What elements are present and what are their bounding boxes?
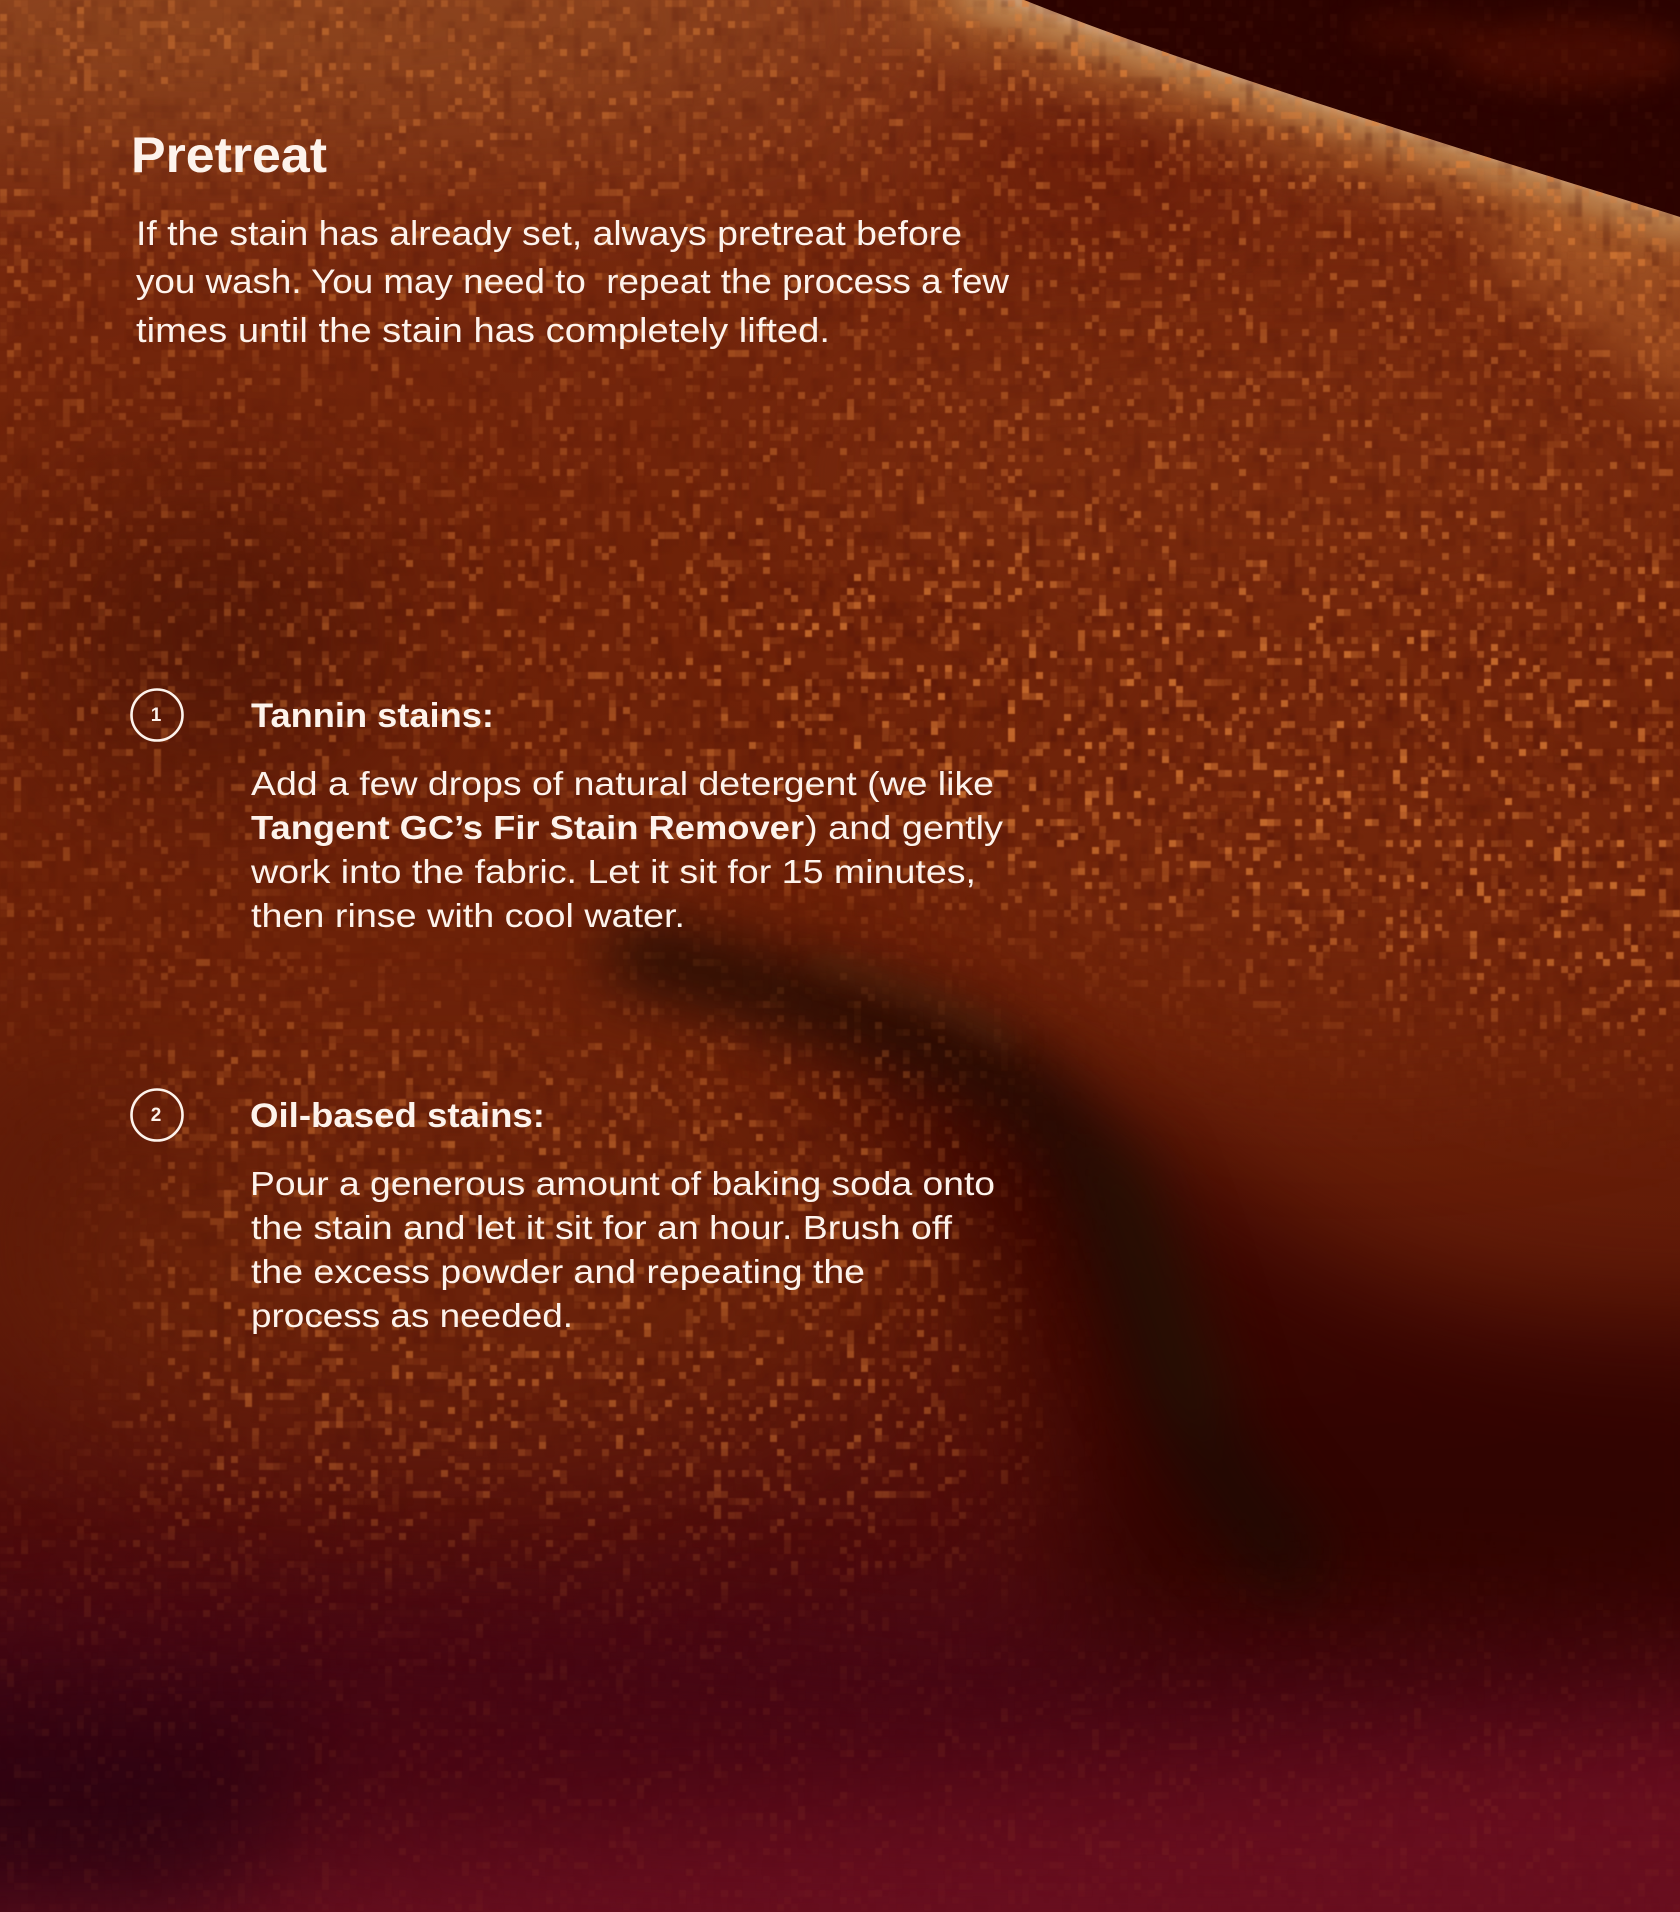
text block: tannin instructions: Tangent GC’s Fir Stain Remover (251, 809, 804, 846)
heading: oil-based stains: Oil-based stains: (250, 1097, 545, 1135)
text block: oil-based instructions: Pour a generous amount of baking soda onto (250, 1165, 995, 1202)
step 1: tannin stains (132, 690, 1004, 934)
icon: number 1 circle (132, 690, 182, 740)
intro text block: you wash. You may need to repeat the process a few (136, 263, 1009, 301)
dark background fold at top right (1024, 0, 1680, 217)
title: Pretreat (131, 127, 327, 183)
text block: tannin instructions: work into the fabric. Let it sit for 15 minutes, (250, 853, 976, 890)
intro text block: If the stain has already set, always pretreat before (136, 215, 962, 253)
intro text block (136, 215, 1009, 350)
step 2: oil-based stains (132, 1090, 995, 1334)
icon: number 2 circle (132, 1090, 182, 1140)
text block: tannin instructions: then rinse with cool water. (251, 897, 685, 934)
text block: oil-based instructions (250, 1165, 995, 1334)
ridge highlight (900, 0, 1680, 390)
intro text block: times until the stain has completely lifted. (136, 312, 830, 350)
icon: number 1 circle: 1 (151, 705, 162, 726)
text block: tannin instructions: Add a few drops of natural detergent (we like (251, 765, 994, 802)
text block: oil-based instructions: process as needed. (251, 1297, 573, 1334)
heading: tannin stains: Tannin stains: (251, 697, 494, 735)
text block: tannin instructions: ) and gently (805, 809, 1004, 846)
text block: oil-based instructions: the excess powder and repeating the (251, 1253, 865, 1290)
icon: number 2 circle: 2 (151, 1105, 161, 1126)
text block: tannin instructions (250, 765, 1004, 934)
text block: oil-based instructions: the stain and let it sit for an hour. Brush off (251, 1209, 953, 1246)
